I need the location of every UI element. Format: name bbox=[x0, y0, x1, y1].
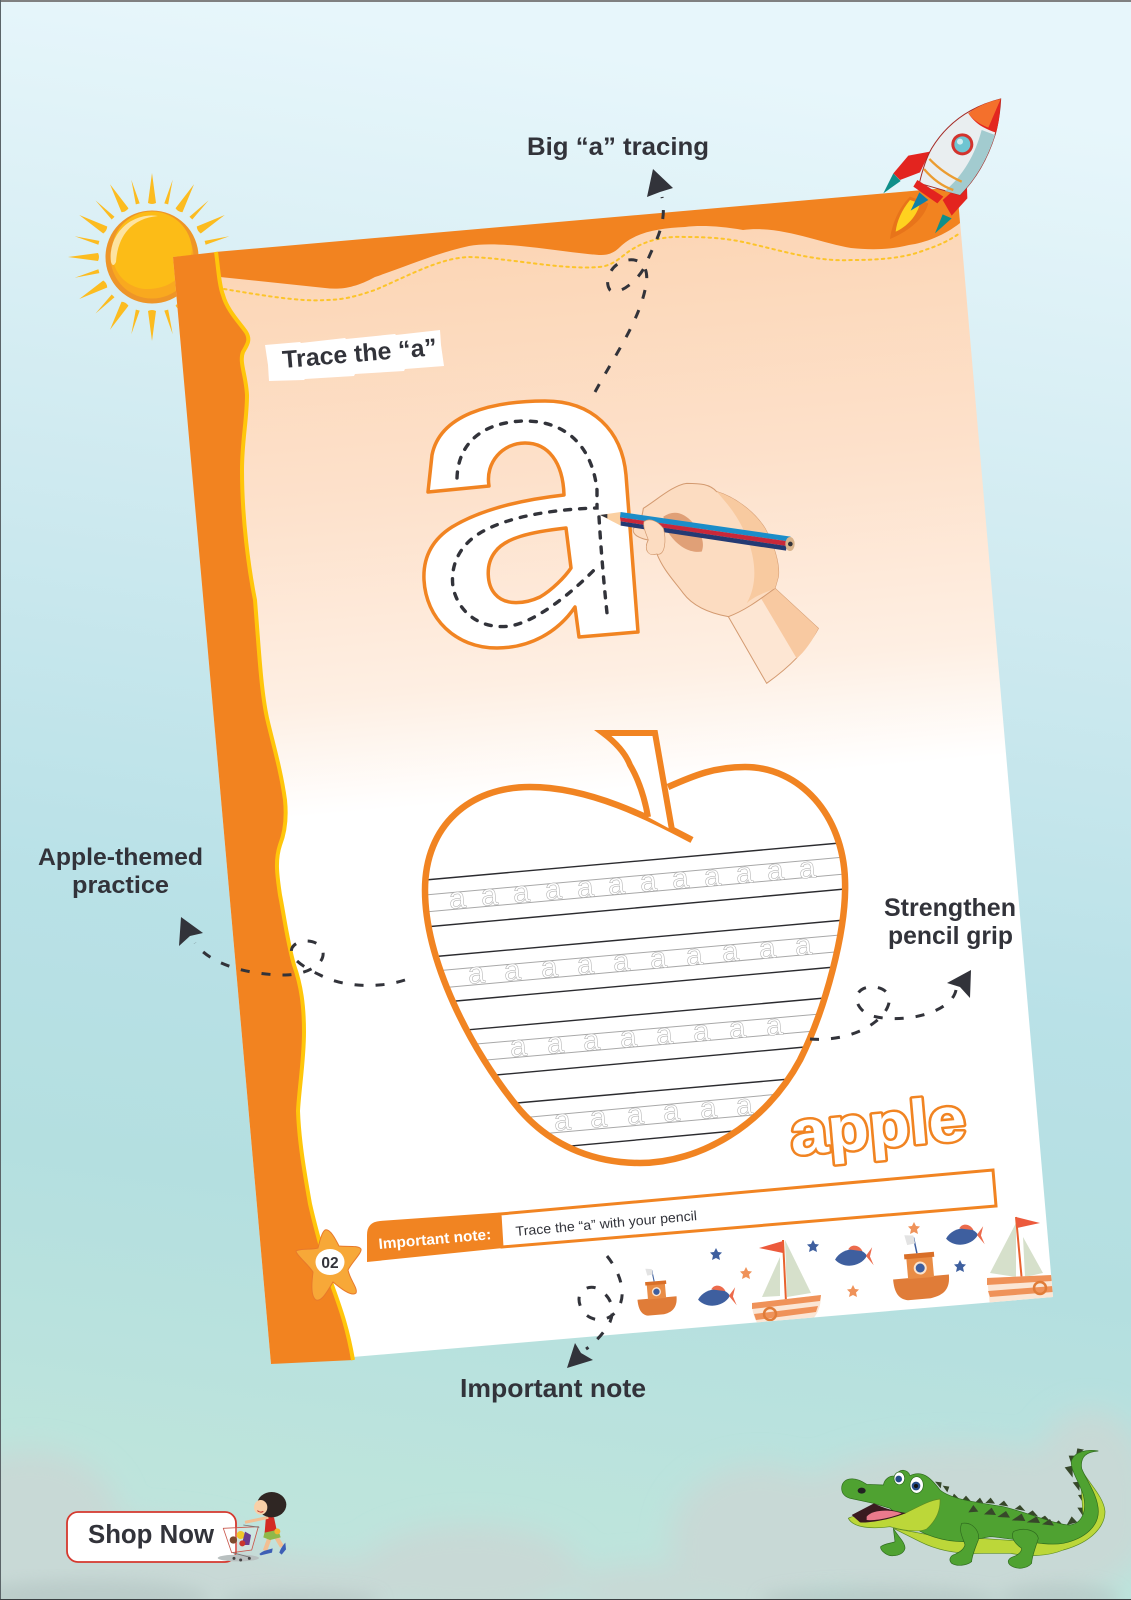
panel: worksheet page bbox=[173, 187, 1053, 1364]
face bbox=[254, 1500, 267, 1515]
tracing dashes on a bbox=[452, 421, 597, 627]
row 4 tracing letters bbox=[552, 1088, 754, 1138]
fish three bbox=[946, 1224, 985, 1245]
back scales bbox=[968, 1505, 1054, 1526]
note tag bbox=[367, 1212, 503, 1262]
arrow: to Big a tracing bbox=[595, 169, 673, 392]
small tugboat bbox=[638, 1268, 677, 1316]
label: Strengthen pencil grip: pencil grip bbox=[888, 922, 1013, 950]
row 2 tracing letters: a bbox=[720, 934, 740, 969]
icon: rocket bbox=[883, 99, 1001, 239]
row 3 tracing letters: a bbox=[508, 1029, 528, 1064]
flame bbox=[890, 197, 928, 239]
row 2 tracing letters bbox=[466, 928, 813, 991]
shop now button: Shop Now bbox=[88, 1521, 214, 1549]
fish two bbox=[835, 1246, 874, 1266]
band yellow edge bbox=[216, 252, 353, 1360]
icon: girl with shopping cart bbox=[218, 1492, 286, 1561]
row 1 tracing letters bbox=[447, 851, 817, 916]
fingers bbox=[644, 520, 665, 555]
middle leg bbox=[950, 1523, 979, 1565]
tail belly bbox=[893, 1465, 1105, 1556]
row 4 tracing letters: a bbox=[552, 1103, 572, 1138]
back spikes bbox=[935, 1448, 1085, 1526]
row 1 tracing letters: a bbox=[606, 867, 626, 902]
important note bar: Important note: bbox=[378, 1226, 492, 1253]
page background bbox=[173, 187, 1053, 1364]
row 2 tracing letters: a bbox=[611, 944, 631, 979]
body bbox=[842, 1450, 1098, 1544]
row 3 tracing letters: a bbox=[581, 1023, 601, 1058]
arrow: to Important note bbox=[567, 1256, 622, 1368]
row 4 tracing letters: a bbox=[734, 1088, 754, 1123]
note text: Trace the “a” with your pencil bbox=[515, 1208, 698, 1239]
row 1 tracing letters: a bbox=[702, 859, 722, 894]
row 1 tracing letters: a bbox=[670, 861, 690, 896]
row 2 tracing letters: a bbox=[539, 950, 559, 985]
apple stem bbox=[603, 733, 672, 830]
star decorations bbox=[710, 1222, 966, 1297]
row 2 tracing letters: a bbox=[648, 941, 668, 976]
cart bbox=[223, 1527, 258, 1553]
skirt bbox=[263, 1530, 281, 1540]
hair bbox=[257, 1492, 286, 1517]
row 3 tracing letters: a bbox=[618, 1020, 638, 1055]
row 1 tracing letters: a bbox=[734, 856, 754, 891]
label: Apple-themed practice: Apple-themed bbox=[38, 844, 203, 871]
left wing bbox=[893, 152, 930, 180]
cart goods bbox=[237, 1531, 245, 1539]
shoes bbox=[259, 1548, 273, 1555]
mouth bbox=[852, 1503, 906, 1523]
row 3 tracing letters: a bbox=[654, 1017, 674, 1052]
icon: hand holding pencil bbox=[600, 483, 818, 683]
row 2 tracing letters: a bbox=[793, 928, 813, 963]
right wing bbox=[943, 178, 967, 216]
legs bbox=[265, 1537, 282, 1551]
row 1 tracing letters: a bbox=[479, 878, 499, 913]
label: Big a tracing: Big “a” tracing bbox=[527, 133, 709, 161]
page left orange band bbox=[173, 252, 354, 1364]
label: Important note: Important note bbox=[460, 1373, 646, 1403]
row 1 tracing letters: a bbox=[638, 864, 658, 899]
important note bar bbox=[367, 1170, 996, 1262]
eyes bbox=[894, 1472, 905, 1485]
shadow bbox=[218, 1555, 259, 1561]
icon: crocodile bbox=[842, 1448, 1105, 1568]
icon: starfish page number bbox=[296, 1230, 361, 1300]
row 4 tracing letters: a bbox=[625, 1097, 645, 1132]
row 4 tracing letters: a bbox=[661, 1094, 681, 1129]
arm bbox=[245, 1517, 268, 1522]
row 3 tracing letters: a bbox=[764, 1008, 784, 1043]
label: Apple-themed practice bbox=[38, 844, 203, 899]
dress bbox=[265, 1516, 277, 1533]
letter a outline bbox=[424, 401, 638, 648]
rocket nose bbox=[968, 99, 1001, 133]
row 3 tracing letters: a bbox=[727, 1011, 747, 1046]
heading: Trace the a strip: Trace the “a” bbox=[281, 334, 438, 374]
label: Strengthen pencil grip: Strengthen bbox=[884, 894, 1016, 922]
background clouds bbox=[0, 1410, 1131, 1600]
sailboat two bbox=[987, 1217, 1054, 1306]
row 2 tracing letters: a bbox=[502, 953, 522, 988]
row 1 tracing letters: a bbox=[543, 872, 563, 907]
row 1 tracing letters: a bbox=[511, 875, 531, 910]
apple outline bbox=[425, 767, 845, 1163]
apple fill bbox=[425, 767, 845, 1163]
row 4 tracing letters: a bbox=[588, 1100, 608, 1135]
row 3 tracing letters bbox=[508, 1008, 784, 1064]
forearm bbox=[728, 588, 818, 683]
fish one bbox=[698, 1286, 737, 1306]
rocket body bbox=[919, 99, 1001, 195]
heading: Trace the a strip bbox=[265, 330, 444, 381]
icon: sun bbox=[68, 173, 230, 341]
shop now button bbox=[67, 1512, 236, 1562]
icon: starfish page number: 02 bbox=[321, 1255, 339, 1272]
note box bbox=[500, 1170, 996, 1247]
row 1 tracing letters: a bbox=[797, 851, 817, 886]
word apple outlined: apple bbox=[787, 1084, 969, 1169]
ruled writing lines bbox=[425, 843, 845, 1147]
rocket base bbox=[913, 180, 943, 203]
arrow: to Strengthen pencil grip bbox=[810, 970, 971, 1039]
rocket window bbox=[951, 133, 973, 155]
apple writing practice bbox=[425, 733, 845, 1163]
page top orange wave bbox=[215, 187, 960, 289]
hand bbox=[633, 483, 779, 617]
top dotted wave bbox=[224, 233, 960, 300]
sailboat one bbox=[752, 1240, 821, 1330]
large tugboat bbox=[893, 1235, 950, 1300]
row 2 tracing letters: a bbox=[575, 947, 595, 982]
pencil bbox=[600, 512, 621, 526]
row 1 tracing letters: a bbox=[765, 853, 785, 888]
row 4 tracing letters: a bbox=[698, 1091, 718, 1126]
row 1 tracing letters: a bbox=[447, 881, 467, 916]
rear leg bbox=[1008, 1529, 1038, 1568]
lower jaw bbox=[848, 1499, 940, 1531]
row 1 tracing letters: a bbox=[575, 870, 595, 905]
tongue bbox=[867, 1511, 902, 1520]
row 2 tracing letters: a bbox=[466, 956, 486, 991]
arrow: to Apple-themed practice bbox=[179, 917, 405, 985]
row 2 tracing letters: a bbox=[684, 938, 704, 973]
label: Strengthen pencil grip bbox=[884, 894, 1016, 950]
rocket stripes bbox=[929, 159, 962, 182]
row 3 tracing letters: a bbox=[545, 1026, 565, 1061]
row 3 tracing letters: a bbox=[691, 1014, 711, 1049]
boats and fish decoration bbox=[635, 1217, 1054, 1330]
row 2 tracing letters: a bbox=[757, 931, 777, 966]
front leg bbox=[881, 1528, 905, 1556]
nostril bbox=[858, 1488, 866, 1494]
big letter a tracing bbox=[424, 401, 638, 648]
label: Apple-themed practice: practice bbox=[72, 872, 169, 899]
